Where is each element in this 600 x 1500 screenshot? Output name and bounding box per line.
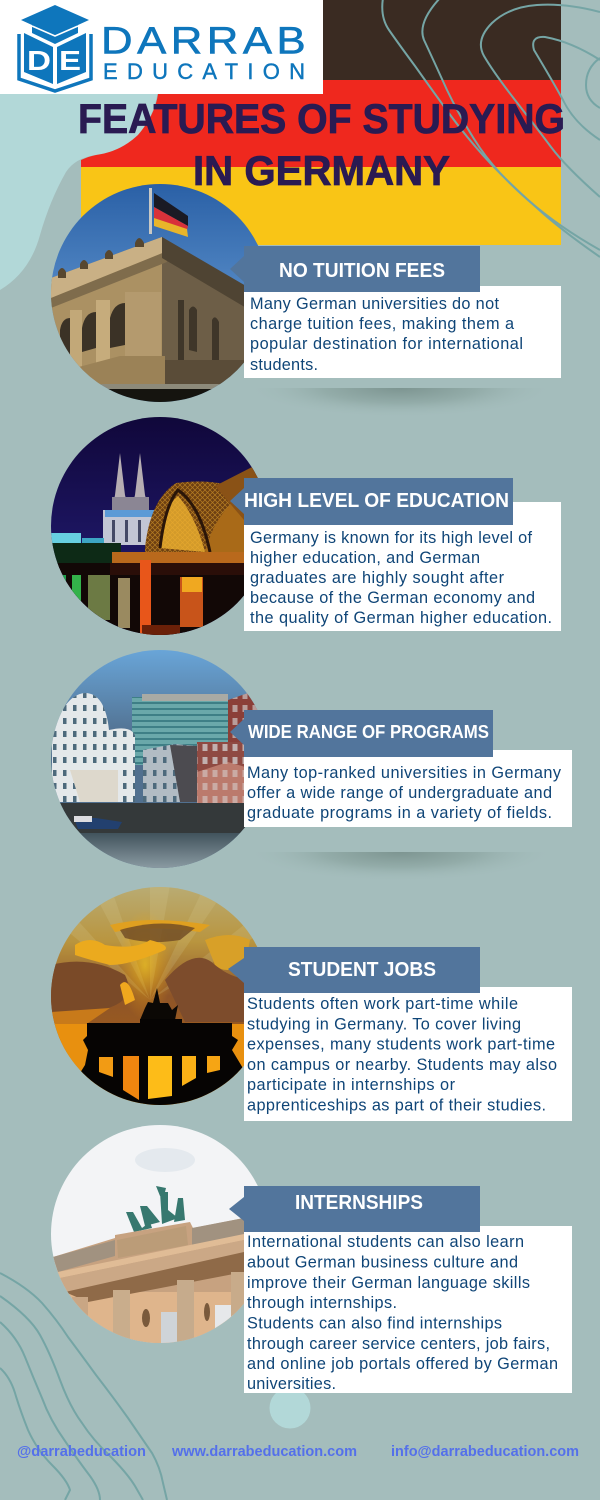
text box: graduate programs in a variety of fields. — [247, 804, 552, 822]
text box: Many German universities do not — [250, 295, 499, 313]
shadow — [245, 388, 555, 448]
title: FEATURES OF STUDYING — [78, 95, 565, 142]
text box: Students often work part-time while — [247, 995, 518, 1013]
text box — [244, 1226, 572, 1393]
photo: Brandenburg Gate at sunset — [51, 885, 269, 1105]
text box — [244, 750, 572, 827]
section 1: no tuition fees — [51, 184, 561, 408]
section 3: wide range of programs — [51, 650, 572, 872]
shadow — [245, 852, 555, 912]
logo wordmark — [101, 19, 306, 84]
footer contacts — [17, 1443, 579, 1460]
text box: and online job portals offered by German — [247, 1355, 558, 1373]
text box — [244, 502, 561, 631]
heading banner — [229, 1186, 480, 1232]
photo: Reichstag building with flag — [51, 184, 270, 403]
icon: graduation cap and book: D — [27, 45, 51, 76]
logo wordmark: EDUCATION — [103, 59, 305, 84]
section 2: high level of education — [51, 417, 561, 635]
text box: about German business culture and — [247, 1254, 518, 1272]
heading banner: STUDENT JOBS — [288, 959, 436, 981]
footer contacts: info@darrabeducation.com — [391, 1443, 579, 1460]
text box: expenses, many students work part-time — [247, 1036, 555, 1054]
text box: higher education, and German — [250, 549, 480, 567]
icon: graduation cap and book — [19, 5, 91, 91]
logo: Darrab Education — [0, 0, 323, 94]
section 5: internships — [51, 1125, 572, 1393]
text box: Germany is known for its high level of — [250, 529, 532, 547]
contour lines bottom left — [0, 1273, 167, 1500]
text box: charge tuition fees, making them a — [250, 315, 515, 333]
text box: through internships. — [247, 1294, 397, 1312]
text box: popular destination for international — [250, 335, 523, 353]
logo wordmark: DARRAB — [101, 19, 306, 62]
text box: because of the German economy and — [250, 589, 535, 607]
icon: graduation cap and book: E — [59, 45, 81, 76]
heading banner: HIGH LEVEL OF EDUCATION — [244, 490, 509, 512]
title: IN GERMANY — [193, 147, 450, 194]
footer contacts: @darrabeducation — [17, 1443, 146, 1460]
text box: International students can also learn — [247, 1233, 524, 1251]
section 4: student jobs — [51, 885, 572, 1121]
heading banner: WIDE RANGE OF PROGRAMS — [248, 722, 489, 742]
photo: Cologne cathedral and bridge at night — [51, 417, 270, 635]
text box: Students can also find internships — [247, 1314, 502, 1332]
text box: universities. — [247, 1375, 336, 1393]
heading banner — [228, 947, 480, 993]
text box: participate in internships or — [247, 1076, 456, 1094]
text box: through career service centers, job fairs, — [247, 1335, 550, 1353]
text box: Many top-ranked universities in Germany — [247, 764, 562, 782]
heading banner — [230, 478, 513, 525]
heading banner: INTERNSHIPS — [295, 1192, 423, 1214]
small decorative circle — [270, 1388, 310, 1428]
heading banner: NO TUITION FEES — [279, 260, 445, 282]
photo: Brandenburg Gate quadriga — [51, 1125, 269, 1345]
text box: improve their German language skills — [247, 1274, 530, 1292]
text box: graduates are highly sought after — [250, 569, 505, 587]
contour lines top right — [382, 0, 600, 257]
text box: the quality of German higher education. — [250, 609, 552, 627]
text box — [244, 286, 561, 378]
footer contacts: www.darrabeducation.com — [171, 1443, 357, 1460]
text box: on campus or nearby. Students may also — [247, 1056, 557, 1074]
German flag background — [81, 0, 561, 245]
text box — [244, 987, 572, 1121]
heading banner — [230, 710, 493, 757]
decorative light teal blob — [0, 90, 158, 290]
text box: apprenticeships as part of their studies. — [247, 1096, 546, 1114]
text box: studying in Germany. To cover living — [247, 1016, 521, 1034]
text box: students. — [250, 356, 318, 374]
photo: Dusseldorf harbour buildings — [51, 650, 269, 869]
heading banner — [230, 246, 480, 292]
title — [78, 95, 565, 194]
text box: offer a wide range of undergraduate and — [247, 784, 552, 802]
